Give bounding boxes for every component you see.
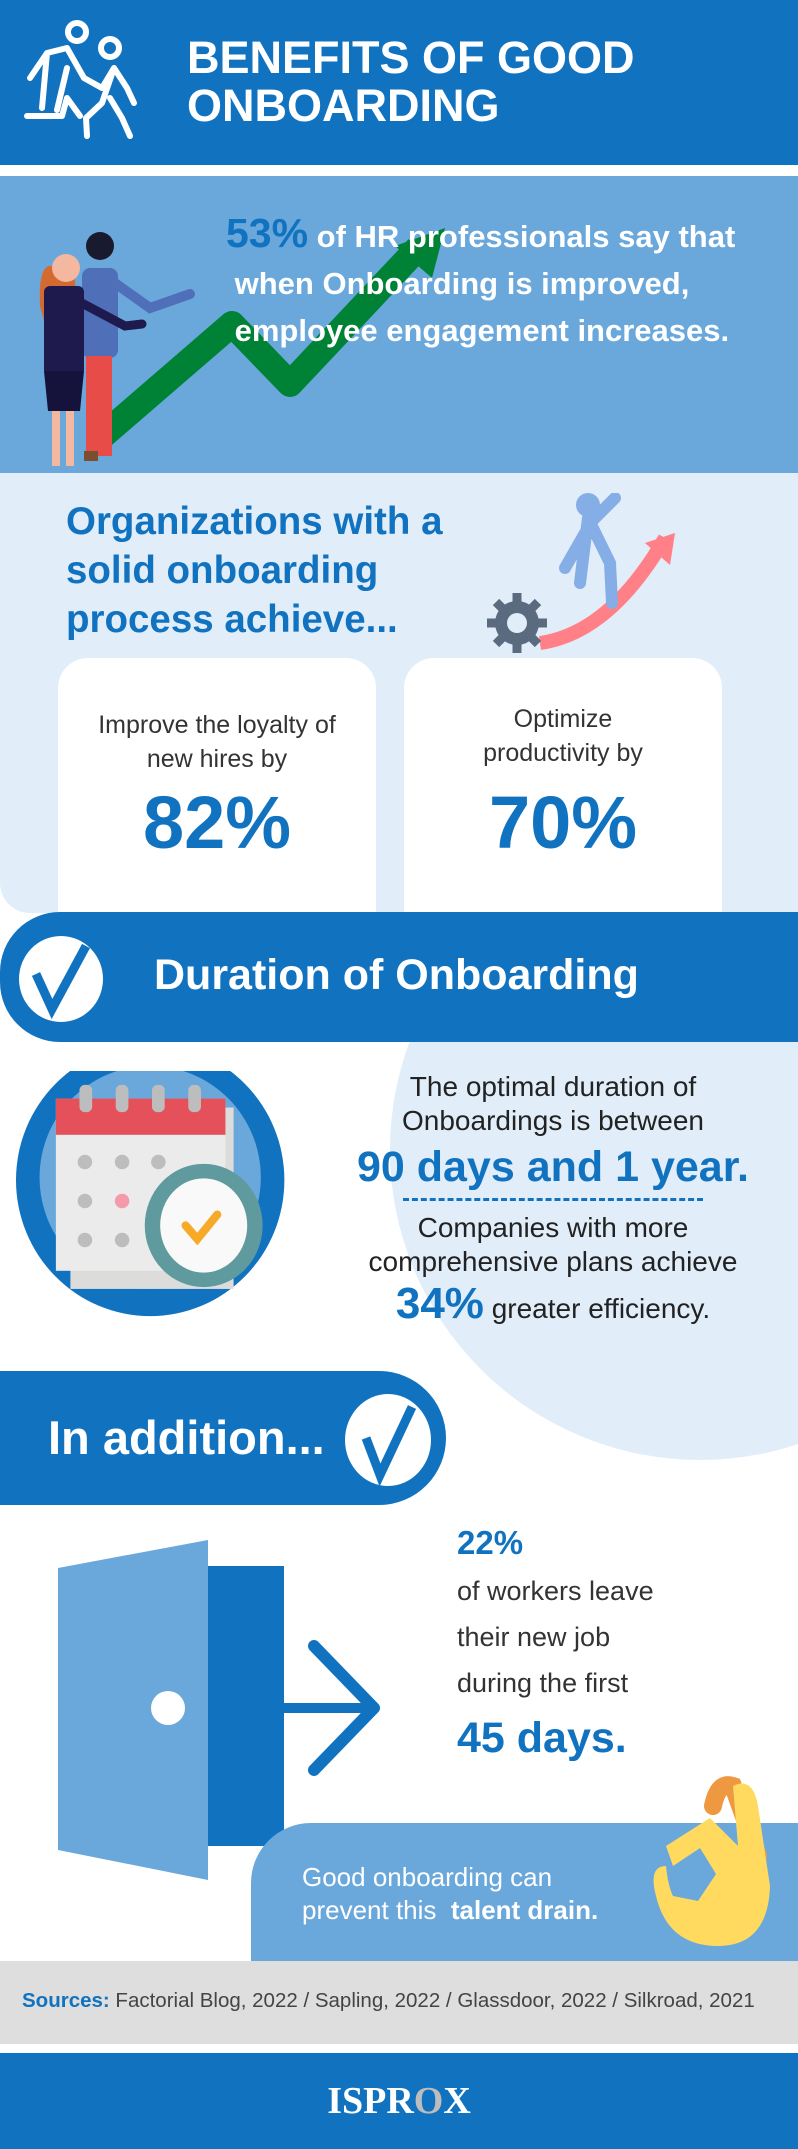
- banner: In addition: In addition...: [48, 1411, 325, 1464]
- stat text: [226, 210, 735, 348]
- stat text: 53% of HR professionals say that: [226, 210, 735, 256]
- card: loyalty 82%: 82%: [143, 781, 291, 864]
- callout: talent drain: prevent this talent drain.: [302, 1895, 598, 1925]
- panel: organizations: [0, 473, 798, 913]
- icon: calendar circle: [16, 1071, 284, 1316]
- footer: logo: ISPROX: [327, 2080, 471, 2122]
- icon: check blob: [345, 1394, 431, 1486]
- banner: Duration of Onboarding: [0, 912, 798, 1042]
- text block: 22% leave: 22%: [457, 1524, 523, 1561]
- text block: optimal duration: The optimal duration of: [410, 1071, 696, 1102]
- title: BENEFITS OF GOOD: [187, 32, 635, 83]
- card: loyalty 82%: new hires by: [147, 745, 287, 773]
- icon: ok hand: [654, 1776, 770, 1946]
- background blob: duration: [390, 840, 798, 1460]
- footer: logo: [0, 2053, 798, 2149]
- text block: optimal duration: 90 days and 1 year.: [357, 1143, 749, 1191]
- text block: optimal duration: Onboardings is between: [402, 1105, 704, 1136]
- text block: optimal duration: comprehensive plans achieve: [369, 1246, 737, 1277]
- panel: 53% stat: [0, 176, 798, 473]
- banner: In addition: [0, 1371, 446, 1505]
- stat text: when Onboarding is improved,: [235, 266, 689, 301]
- card: loyalty 82%: Improve the loyalty of: [98, 711, 336, 739]
- callout: talent drain: Good onboarding can: [302, 1862, 552, 1892]
- icon: gear and climbing person: [487, 493, 675, 653]
- card: productivity 70%: [404, 658, 722, 913]
- heading: [66, 500, 443, 641]
- text block: optimal duration: Companies with more: [418, 1212, 688, 1243]
- heading: solid onboarding: [66, 549, 378, 592]
- text block: optimal duration: 34% greater efficiency.: [396, 1279, 710, 1328]
- card: productivity 70%: productivity by: [483, 739, 643, 767]
- card: productivity 70%: Optimize: [514, 705, 612, 733]
- title: ONBOARDING: [187, 80, 500, 131]
- icon: helping people: [24, 20, 137, 139]
- text block: 22% leave: of workers leave: [457, 1576, 654, 1606]
- heading: Organizations with a: [66, 500, 442, 543]
- text block: optimal duration: [357, 1071, 749, 1328]
- dashed divider: [403, 1198, 703, 1201]
- stat text: employee engagement increases.: [235, 313, 729, 348]
- title: [187, 32, 635, 131]
- card: loyalty 82%: [58, 658, 376, 913]
- text block: 22% leave: 45 days.: [457, 1714, 627, 1762]
- sources: Sources: Factorial Blog, 2022 / Sapling, 2022 / Glassdoor, 2022 / Silkroad, 2021: [22, 1989, 755, 2012]
- text block: 22% leave: during the first: [457, 1668, 628, 1698]
- sources: [0, 1961, 798, 2044]
- icon: check blob: [19, 936, 103, 1022]
- text block: 22% leave: their new job: [457, 1622, 610, 1652]
- header: [0, 0, 798, 165]
- callout: talent drain: [251, 1823, 798, 1961]
- text block: 22% leave: [457, 1524, 654, 1762]
- card: productivity 70%: 70%: [489, 781, 637, 864]
- heading: process achieve...: [66, 598, 398, 641]
- illustration: couple with green arrow: [40, 228, 445, 466]
- icon: door with exit arrow: [58, 1540, 380, 1880]
- heading: Duration of Onboarding: [154, 951, 639, 999]
